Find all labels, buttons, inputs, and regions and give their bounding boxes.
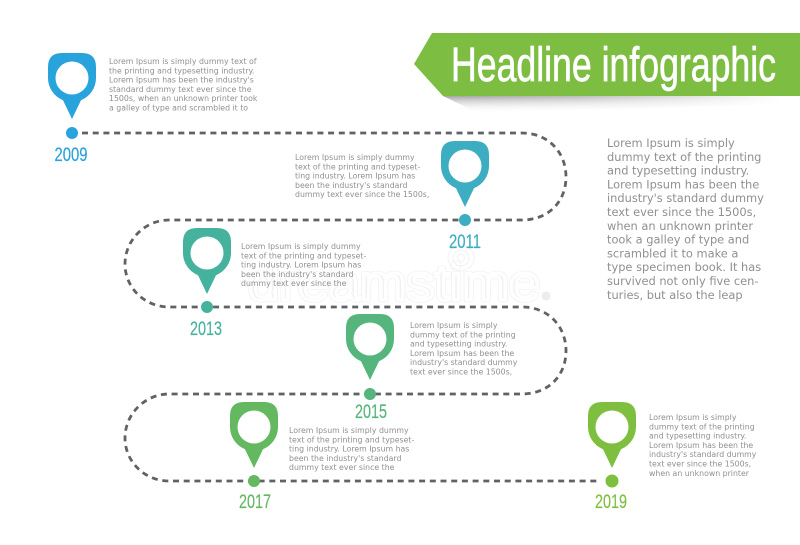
milestone 2015: [346, 314, 518, 423]
dot 2015: [364, 388, 376, 400]
text 2019: industry's standard dummy: [649, 450, 757, 459]
watermark: dreamstime: [248, 255, 540, 311]
year 2015: 2015: [355, 402, 387, 423]
year 2013: 2013: [190, 319, 222, 340]
text 2011: Lorem Ipsum is simply dummy: [295, 153, 415, 162]
text 2019: when an unknown printer: [649, 469, 750, 478]
milestone 2017: [230, 402, 414, 513]
text 2017: dummy text ever since the: [289, 463, 395, 472]
right text block: Lorem Ipsum is simply: [607, 136, 735, 150]
dot 2017: [248, 475, 260, 487]
right text block: industry's standard dummy: [607, 191, 764, 205]
dot 2019: [606, 474, 618, 488]
text 2017: ting industry. Lorem Ipsum has: [289, 445, 409, 454]
text 2009: the printing and typesetting industry.: [109, 66, 255, 75]
text 2009: 1500s, when an unknown printer took: [109, 94, 258, 103]
right text block: scrambled it to make a: [607, 246, 738, 260]
text 2013: dummy text ever since the: [241, 279, 347, 288]
text 2015: dummy text of the printing: [410, 330, 516, 339]
icon: pin 2015: [346, 314, 394, 380]
right text block: type specimen book. It has: [607, 260, 761, 274]
text 2013: ting industry. Lorem Ipsum has: [241, 261, 361, 270]
icon: pin 2009: [48, 53, 96, 119]
right text block: Lorem Ipsum has been the: [607, 177, 759, 191]
dot 2009: [66, 127, 78, 139]
milestone 2009: [48, 53, 258, 166]
text 2017: text of the printing and typeset-: [289, 435, 414, 444]
text 2015: Lorem Ipsum has been the: [410, 349, 514, 358]
year 2009: 2009: [54, 145, 88, 166]
watermark: dreamstime: [248, 255, 540, 311]
text 2019: dummy text of the printing: [649, 422, 755, 431]
right text block: turies, but also the leap: [607, 288, 743, 302]
text 2009: Lorem Ipsum has been the industry's: [109, 76, 254, 85]
milestone 2019: [588, 402, 757, 513]
text 2019: Lorem Ipsum is simply: [649, 413, 737, 422]
headline banner: [414, 33, 800, 113]
text 2017: been the industry's standard: [289, 454, 401, 463]
icon: pin 2017: [230, 402, 278, 468]
year 2011: 2011: [449, 232, 481, 253]
text 2011: been the industry's standard: [295, 181, 407, 190]
icon: pin 2013: [183, 228, 231, 294]
dot 2011: [459, 214, 471, 226]
right text block: and typesetting industry.: [607, 164, 749, 178]
right text block: survived not only five cen-: [607, 274, 758, 288]
dashed timeline path: [82, 133, 600, 481]
right text block: when an unknown printer: [607, 219, 753, 233]
text 2009: Lorem Ipsum is simply dummy text of: [109, 57, 257, 66]
text 2011: ting industry. Lorem Ipsum has: [295, 172, 415, 181]
text 2009: standard dummy text ever since the: [109, 85, 252, 94]
banner shadow: [443, 96, 754, 108]
text 2019: text ever since the 1500s,: [649, 460, 751, 468]
text 2015: Lorem Ipsum is simply: [410, 321, 498, 330]
milestone 2013: [183, 228, 366, 340]
text 2015: and typesetting industry.: [410, 340, 507, 349]
right text block: took a galley of type and: [607, 233, 749, 247]
icon: pin 2019: [588, 402, 636, 468]
text 2015: text ever since the 1500s,: [410, 368, 512, 376]
text 2019: and typesetting industry.: [649, 432, 746, 441]
text 2009: a galley of type and scrambled it to: [109, 104, 248, 112]
banner shape: [414, 33, 800, 96]
text 2019: Lorem Ipsum has been the: [649, 441, 753, 450]
text 2013: been the industry's standard: [241, 270, 353, 279]
right text block: dummy text of the printing: [607, 150, 761, 164]
text 2013: Lorem Ipsum is simply dummy: [241, 242, 361, 251]
year 2017: 2017: [239, 492, 271, 513]
icon: pin 2011: [441, 141, 489, 207]
milestone 2011: [295, 141, 489, 253]
right text block: text ever since the 1500s,: [607, 205, 756, 219]
dot 2013: [201, 301, 213, 313]
text 2015: industry's standard dummy: [410, 358, 518, 367]
text 2013: text of the printing and typeset-: [241, 251, 366, 260]
text 2017: Lorem Ipsum is simply dummy: [289, 426, 409, 435]
year 2019: 2019: [595, 492, 627, 513]
text 2011: text of the printing and typeset-: [295, 162, 420, 171]
text 2011: dummy text ever since the 1500s,: [295, 190, 429, 199]
